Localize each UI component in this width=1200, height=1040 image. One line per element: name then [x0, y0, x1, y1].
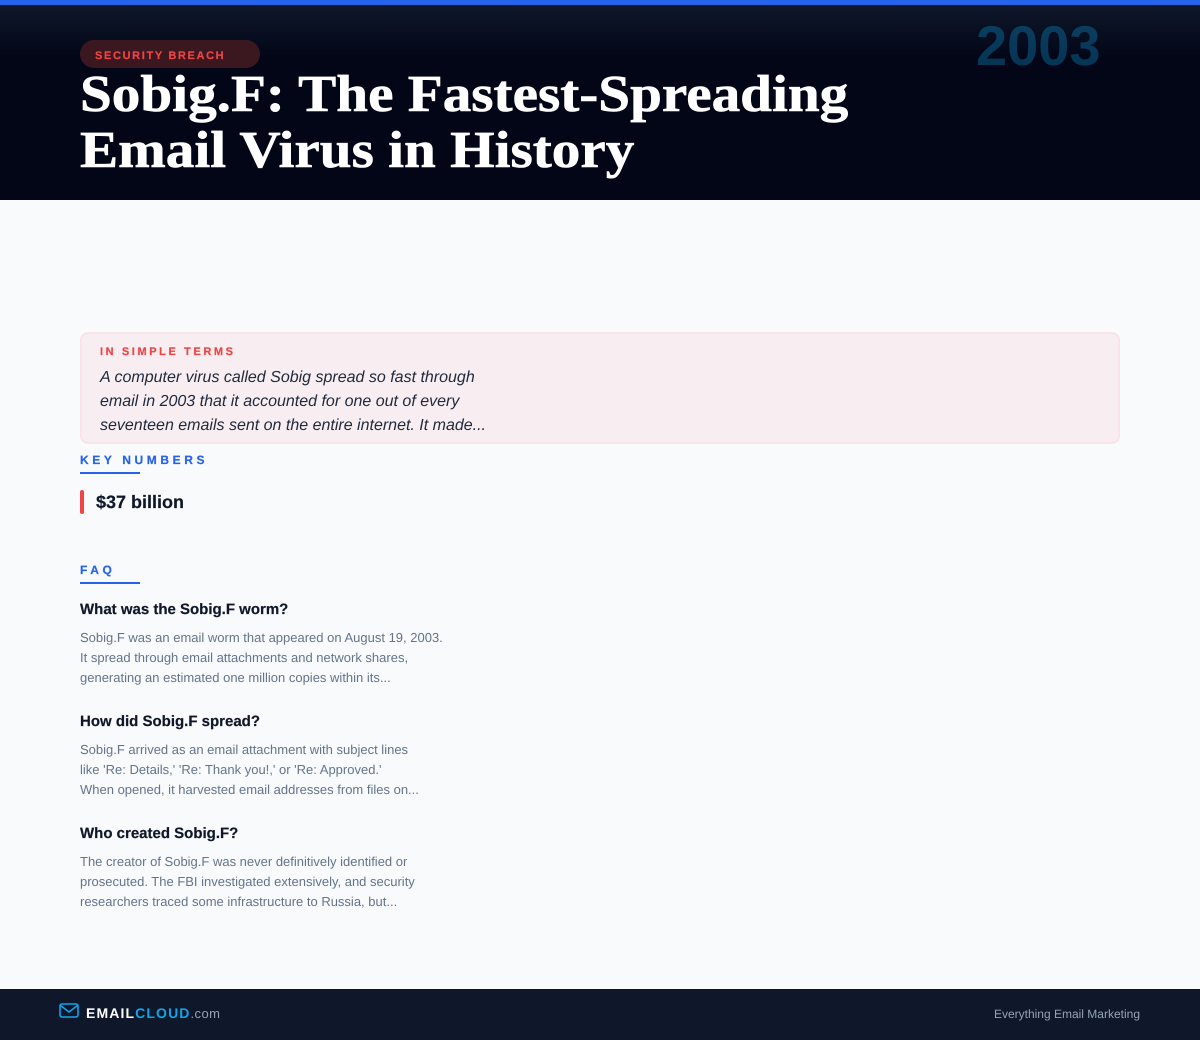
heading: key numbers: KEY NUMBERS	[80, 453, 208, 467]
faq answer 3: prosecuted. The FBI investigated extensively, and security	[80, 874, 415, 889]
panel text: A computer virus called Sobig spread so fast through	[100, 369, 475, 386]
panel text	[99, 369, 486, 434]
title	[80, 66, 848, 179]
icon: envelope	[59, 1003, 79, 1018]
faq answer 1	[80, 630, 443, 685]
stat: 37 billion	[80, 490, 184, 514]
faq answer 2: When opened, it harvested email addresses from files on...	[80, 782, 419, 797]
panel: in simple terms	[80, 332, 1120, 444]
faq answer 1: Sobig.F was an email worm that appeared on August 19, 2003.	[80, 630, 443, 645]
heading: FAQ: FAQ	[80, 563, 115, 577]
panel text: seventeen emails sent on the entire internet. It made...	[100, 417, 486, 434]
stat accent bar	[80, 490, 84, 514]
panel label: IN SIMPLE TERMS	[100, 346, 236, 358]
header band	[0, 0, 1200, 200]
faq answer 3: The creator of Sobig.F was never definitively identified or	[80, 854, 407, 869]
logo wordmark: EMAILCLOUD.com	[86, 1005, 220, 1021]
faq answer 3	[80, 854, 415, 909]
badge label: SECURITY BREACH	[95, 50, 225, 62]
panel text: email in 2003 that it accounted for one out of every	[100, 393, 459, 410]
faq answer 3: researchers traced some infrastructure to Russia, but...	[80, 894, 397, 909]
title: Email Virus in History	[80, 122, 634, 179]
category badge	[80, 40, 260, 68]
faq answer 1: It spread through email attachments and network shares,	[80, 650, 408, 665]
title: Sobig.F: The Fastest-Spreading	[80, 66, 848, 123]
faq answer 2: like 'Re: Details,' 'Re: Thank you!,' or 'Re: Approved.'	[80, 762, 382, 777]
faq answer 2	[80, 742, 419, 797]
faq question 2: How did Sobig.F spread?	[80, 713, 260, 730]
footer	[0, 989, 1200, 1040]
faq question 3: Who created Sobig.F?	[80, 825, 238, 842]
tagline: Everything Email Marketing	[994, 1007, 1140, 1021]
faq answer 1: generating an estimated one million copies within its...	[80, 670, 391, 685]
top accent bar	[0, 0, 1200, 5]
year watermark: 2003	[976, 14, 1101, 77]
stat value: $37 billion	[96, 492, 184, 512]
faq question 1: What was the Sobig.F worm?	[80, 601, 288, 618]
faq answer 2: Sobig.F arrived as an email attachment with subject lines	[80, 742, 408, 757]
